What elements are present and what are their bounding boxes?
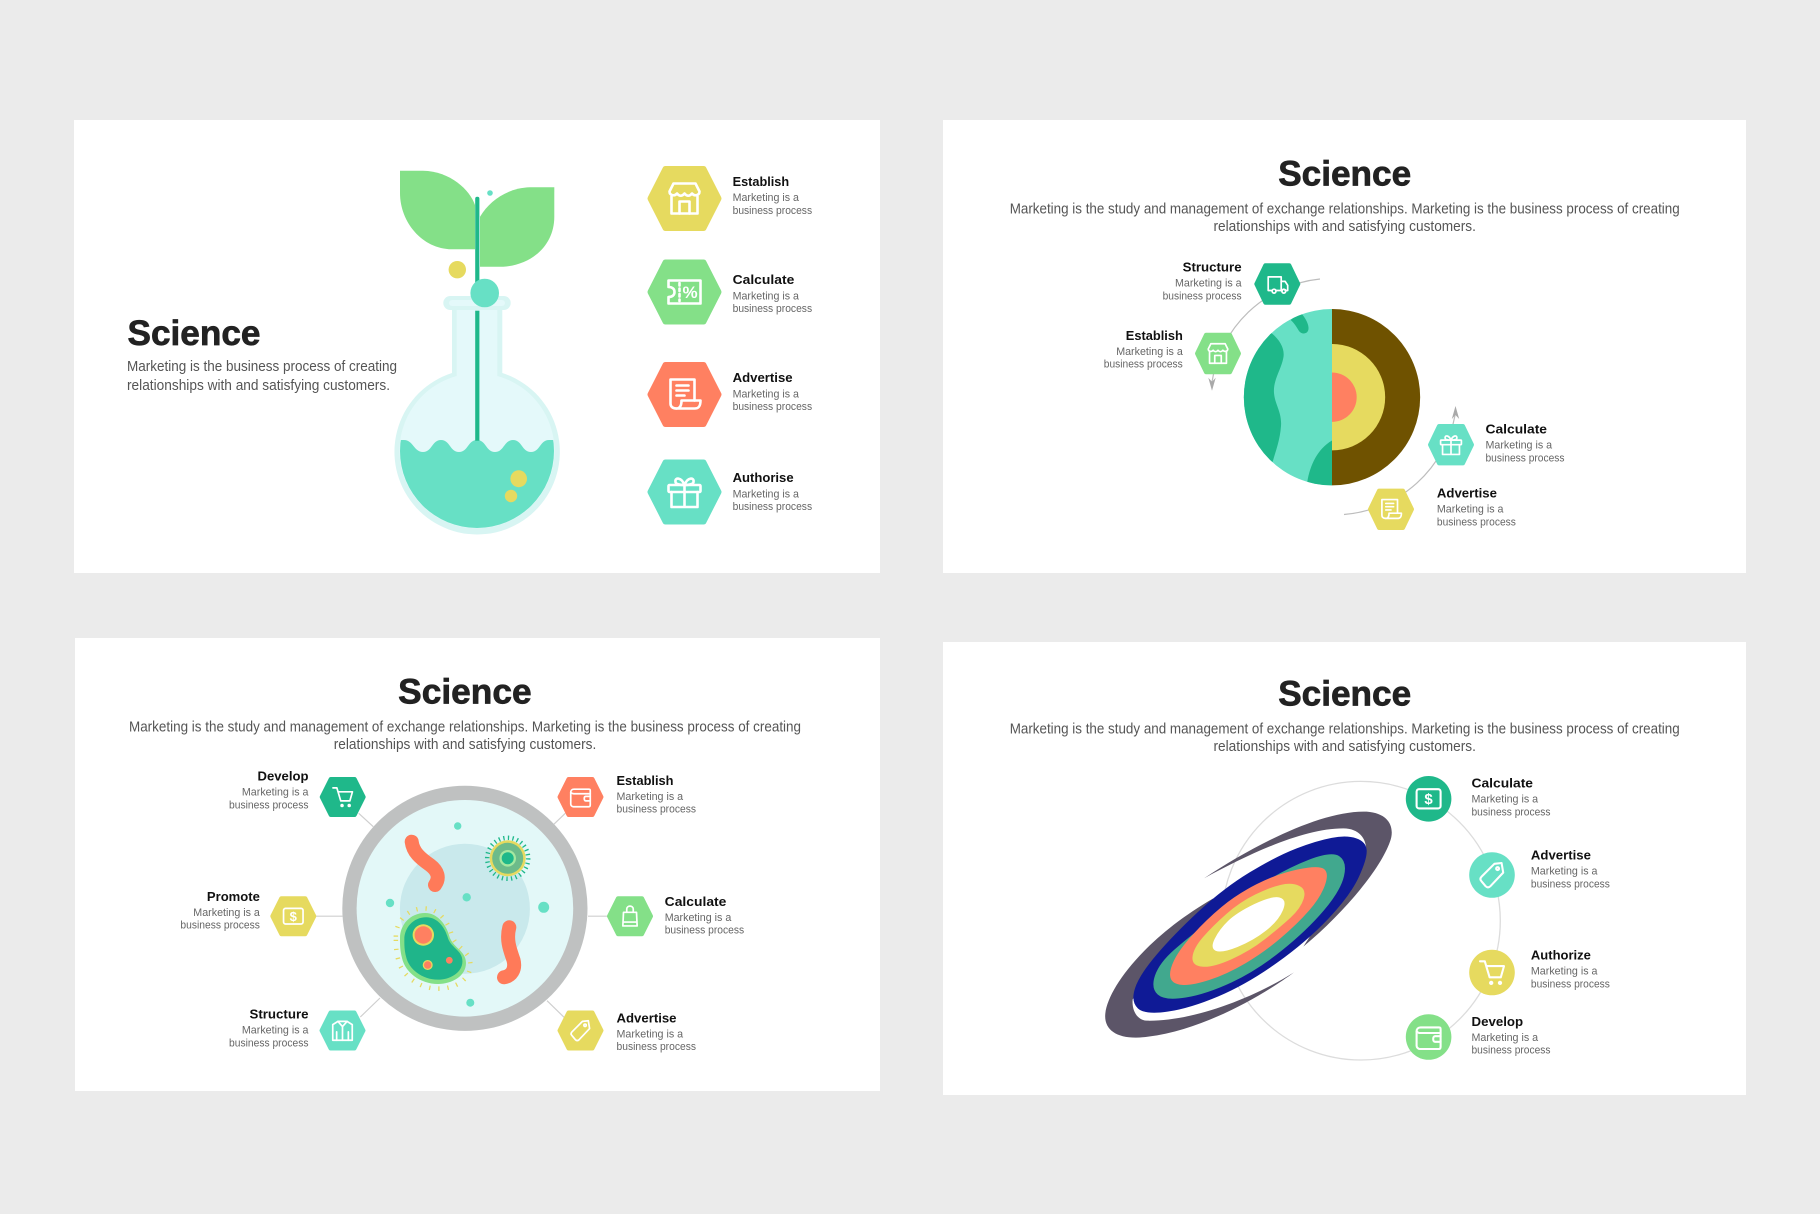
- item: Establish: business process: [616, 804, 696, 816]
- item: Advertise: Advertise: [1531, 848, 1591, 863]
- item: Advertise: Marketing is a: [733, 388, 800, 400]
- item: Calculate: Marketing is a: [1472, 794, 1539, 806]
- flask with plant illustration: [394, 171, 560, 540]
- item: Advertise: Marketing is a: [616, 1028, 684, 1040]
- description: flask slide: relationships with and satisfying customers.: [127, 378, 390, 394]
- item: Promote: Promote: [207, 889, 260, 904]
- title: flask slide: Science: [128, 314, 260, 353]
- item: Advertise: [650, 365, 813, 424]
- item: Authorize: Authorize: [1531, 948, 1591, 963]
- item: Authorize: [1469, 948, 1610, 995]
- item: Calculate: [1430, 422, 1565, 464]
- item: Calculate: business process: [665, 925, 745, 937]
- item: Establish: business process: [733, 205, 813, 217]
- item: Advertise: Marketing is a: [1437, 504, 1504, 516]
- description: petri slide: [129, 720, 801, 753]
- item: Authorise: business process: [733, 501, 813, 513]
- item: Calculate: Marketing is a: [665, 912, 732, 924]
- description: flask slide: Marketing is the business process of creating: [127, 359, 397, 375]
- item: Authorise: Marketing is a: [733, 488, 800, 500]
- description: flask slide: [127, 359, 397, 394]
- orbit ring: [1222, 781, 1500, 1060]
- item: Calculate: Calculate: [1486, 422, 1547, 437]
- title: petri slide: Science: [398, 672, 532, 711]
- item: Establish: Establish: [1126, 328, 1183, 343]
- item: Establish: [1104, 328, 1239, 372]
- item: Develop: Marketing is a: [1472, 1032, 1539, 1044]
- description: earth slide: [1010, 202, 1680, 235]
- item: Calculate: Calculate: [665, 894, 726, 909]
- item: Establish: Marketing is a: [1116, 346, 1184, 358]
- item: Advertise: Advertise: [733, 370, 793, 385]
- item: Promote: [180, 889, 314, 934]
- item: Calculate: Marketing is a: [1486, 440, 1553, 452]
- item: Establish: Marketing is a: [616, 791, 684, 803]
- item: Establish: Establish: [616, 773, 674, 788]
- item: Structure: [229, 1007, 364, 1049]
- item: Authorize: Marketing is a: [1531, 966, 1598, 978]
- panel: earth layers slide: [943, 120, 1746, 573]
- item: Develop: Develop: [1472, 1014, 1523, 1029]
- description: earth slide: relationships with and satisfying customers.: [1213, 219, 1476, 235]
- item: Establish: Establish: [733, 174, 789, 189]
- item: Advertise: business process: [1437, 516, 1516, 528]
- earth cross-section globe: [1230, 309, 1420, 490]
- item: Promote: $: [290, 909, 298, 924]
- item: Develop: business process: [229, 799, 309, 811]
- item: Calculate: [609, 894, 745, 937]
- item: Structure: business process: [1163, 290, 1242, 302]
- connector lines: [316, 813, 610, 1018]
- item: Establish: Marketing is a: [733, 192, 800, 204]
- item: Establish: [650, 169, 813, 228]
- description: galaxy slide: Marketing is the study and management of exchange relationships. Marketing is the business process of creating: [1010, 722, 1680, 738]
- panel: galaxy slide: [943, 642, 1746, 1095]
- item: Structure: business process: [229, 1037, 309, 1049]
- title: galaxy slide: Science: [1278, 675, 1411, 714]
- item: Calculate: business process: [1472, 806, 1551, 818]
- item: Authorize: business process: [1531, 978, 1610, 990]
- item: Advertise: business process: [616, 1041, 696, 1053]
- item: Advertise: Advertise: [1437, 486, 1497, 501]
- item: Promote: business process: [180, 920, 260, 932]
- item: Calculate: Calculate: [733, 272, 794, 287]
- item: Advertise: [1370, 486, 1516, 528]
- item: Develop: Marketing is a: [242, 787, 309, 799]
- item: Structure: Structure: [250, 1007, 308, 1022]
- panel: petri dish slide: [75, 638, 880, 1091]
- item: Structure: Structure: [1183, 260, 1242, 275]
- description: petri slide: Marketing is the study and management of exchange relationships. Marketing is the business process of creating: [129, 720, 801, 736]
- petri dish with microbes: [342, 786, 588, 1031]
- description: petri slide: relationships with and satisfying customers.: [334, 737, 596, 753]
- item: Develop: [229, 768, 364, 815]
- panel: flask slide: [74, 120, 880, 573]
- item: Calculate: %: [682, 283, 698, 302]
- item: Promote: Marketing is a: [193, 907, 261, 919]
- spiral galaxy: [1105, 812, 1392, 1038]
- item: Authorise: [650, 462, 813, 522]
- item: Calculate: business process: [1486, 452, 1565, 464]
- item: Calculate: Marketing is a: [733, 290, 800, 302]
- item: Calculate: Calculate: [1472, 775, 1533, 790]
- item: Advertise: business process: [1531, 878, 1610, 890]
- item: Develop: business process: [1472, 1045, 1551, 1057]
- description: earth slide: Marketing is the study and management of exchange relationships. Marketing is the business process of creating: [1010, 202, 1680, 218]
- item: Advertise: Advertise: [616, 1010, 676, 1025]
- item: Calculate: [1406, 775, 1551, 822]
- item: Advertise: [1469, 848, 1610, 898]
- item: Establish: business process: [1104, 359, 1183, 371]
- item: Structure: Marketing is a: [242, 1025, 309, 1037]
- item: Calculate: [650, 262, 813, 322]
- description: galaxy slide: relationships with and satisfying customers.: [1213, 739, 1476, 755]
- item: Calculate: $: [1424, 791, 1433, 808]
- item: Advertise: Marketing is a: [1531, 866, 1598, 878]
- item: Structure: Marketing is a: [1175, 278, 1242, 290]
- description: galaxy slide: [1010, 722, 1680, 755]
- item: Develop: Develop: [258, 768, 309, 783]
- orbit arrows: [1208, 279, 1459, 514]
- item: Advertise: [560, 1010, 696, 1053]
- item: Develop: [1406, 1014, 1551, 1060]
- item: Authorise: Authorise: [733, 470, 794, 485]
- item: Calculate: business process: [733, 303, 813, 315]
- title: earth slide: Science: [1278, 154, 1411, 194]
- item: Structure: [1163, 260, 1298, 303]
- item: Advertise: business process: [733, 401, 813, 413]
- item: Establish: [560, 773, 696, 816]
